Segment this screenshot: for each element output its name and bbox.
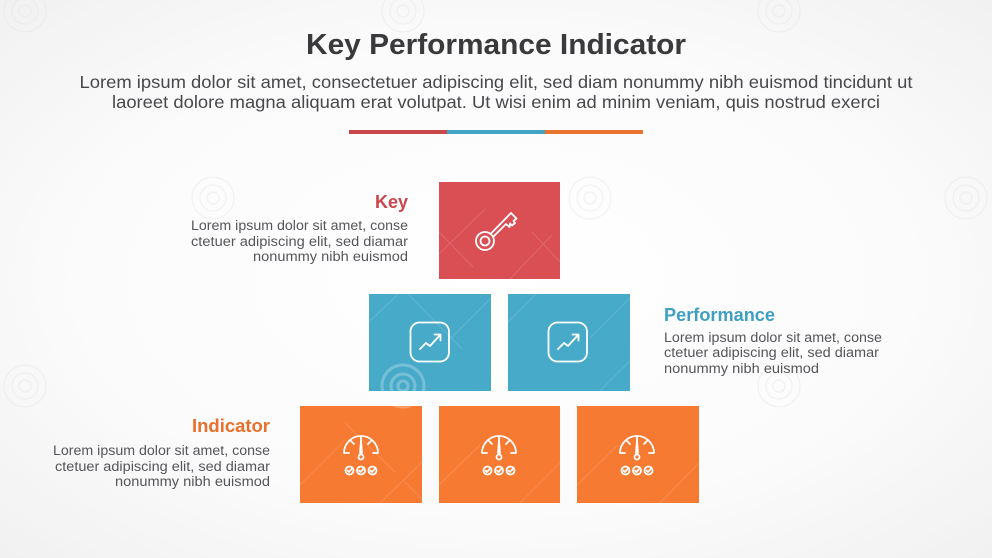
panel: performance block 2 <box>508 294 630 391</box>
icon: trend chart <box>410 322 449 362</box>
subtitle text block: Lorem ipsum dolor sit amet, consectetuer adipiscing elit, sed diam nonummy nibh euismod tincidunt ut <box>80 72 913 92</box>
title: Key Performance Indicator <box>306 29 686 61</box>
panel: key block <box>439 182 560 279</box>
panel: indicator block 1 <box>300 406 422 503</box>
tri-colour divider <box>349 130 643 134</box>
label block: Performance: Performance <box>664 304 775 325</box>
label block: Indicator: nonummy nibh euismod <box>115 474 270 489</box>
label block: Key: Lorem ipsum dolor sit amet, conse <box>191 218 408 233</box>
label block: Key: Key <box>375 191 409 212</box>
subtitle text block: laoreet dolore magna aliquam erat volutpat. Ut wisi enim ad minim veniam, quis nostrud exerci <box>112 92 880 112</box>
panel: performance block 1 <box>369 294 491 391</box>
label block: Indicator <box>53 415 271 489</box>
label block: Key: nonummy nibh euismod <box>253 249 408 264</box>
label block: Indicator: Indicator <box>192 415 270 436</box>
label block: Key: ctetuer adipiscing elit, sed diamar <box>191 234 409 249</box>
icon: trend chart <box>548 322 587 362</box>
icon: gauge with checks <box>482 436 516 474</box>
subtitle text block <box>80 72 913 112</box>
icon: gauge with checks <box>620 436 654 474</box>
label block: Key <box>191 191 409 264</box>
label block: Performance: ctetuer adipiscing elit, sed diamar <box>664 345 880 360</box>
icon: key <box>476 213 516 250</box>
panel: indicator block 3 <box>577 406 699 503</box>
label block: Performance <box>664 304 882 376</box>
label block: Indicator: ctetuer adipiscing elit, sed diamar <box>55 459 271 474</box>
label block: Indicator: Lorem ipsum dolor sit amet, conse <box>53 443 270 458</box>
panel: indicator block 2 <box>439 406 560 503</box>
icon: gauge with checks <box>344 436 378 474</box>
label block: Performance: nonummy nibh euismod <box>664 361 819 376</box>
label block: Performance: Lorem ipsum dolor sit amet, conse <box>664 330 882 345</box>
